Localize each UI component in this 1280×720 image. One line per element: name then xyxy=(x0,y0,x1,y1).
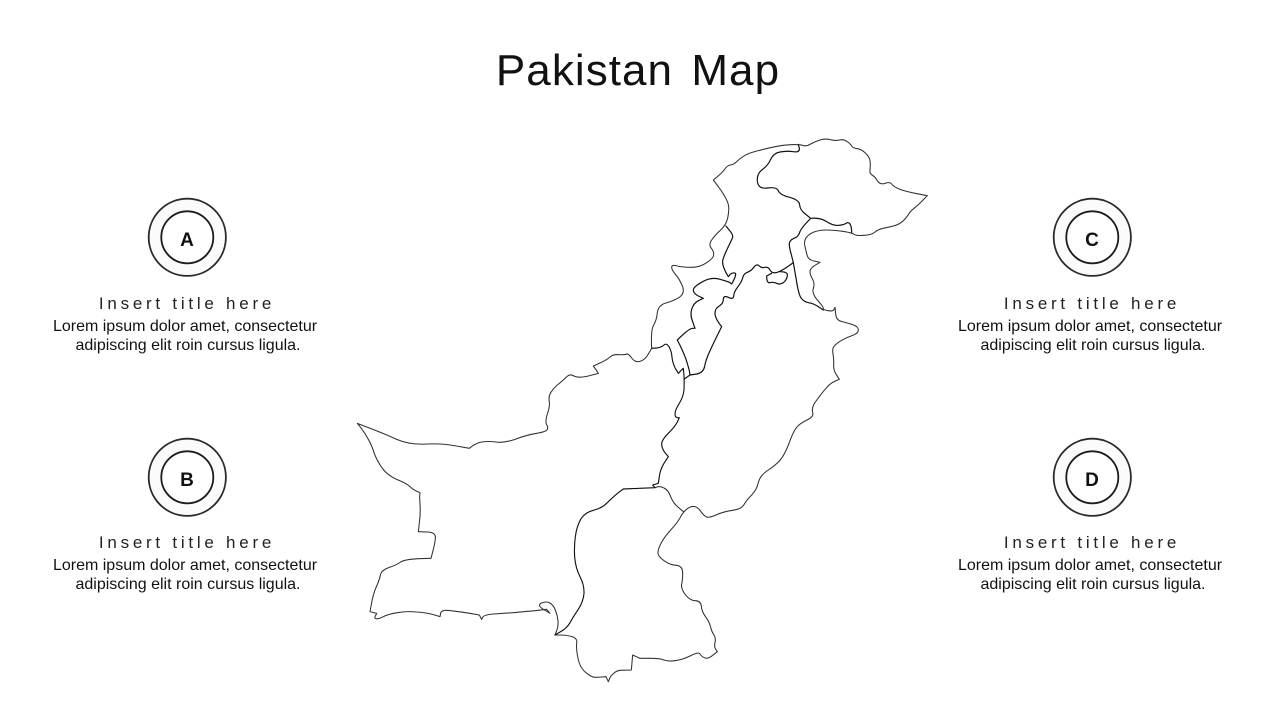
heading A: Insert title here xyxy=(99,294,275,313)
heading C: Insert title here xyxy=(1004,294,1180,313)
text C line 2: adipiscing elit roin cursus ligula. xyxy=(980,337,1206,354)
icon: badge A xyxy=(148,198,227,277)
boundary: Gilgit-Baltistan xyxy=(757,144,811,263)
text B line 2: adipiscing elit roin cursus ligula. xyxy=(76,576,300,593)
boundary: Punjab and Sindh xyxy=(655,487,683,512)
icon: badge D: D xyxy=(1085,470,1099,491)
boundary: Azad Kashmir north xyxy=(811,218,852,233)
text B line 1: Lorem ipsum dolor amet, consectetur xyxy=(53,557,317,574)
boundary: tribal areas xyxy=(677,226,736,340)
icon: badge C xyxy=(1052,198,1132,277)
title: Pakistan Map xyxy=(496,46,780,95)
panel: A xyxy=(53,198,317,354)
outline: southern and western border xyxy=(357,348,652,682)
text D line 2: adipiscing elit roin cursus ligula. xyxy=(980,576,1206,593)
shape: Islamabad xyxy=(767,272,787,284)
heading B: Insert title here xyxy=(99,533,275,552)
heading D: Insert title here xyxy=(1004,533,1180,552)
boundary: Azad Kashmir east xyxy=(793,263,823,310)
text D line 1: Lorem ipsum dolor amet, consectetur xyxy=(958,557,1222,574)
panel: D xyxy=(958,438,1222,593)
icon: badge D xyxy=(1052,438,1132,517)
outline: eastern border xyxy=(640,379,839,661)
text A line 2: adipiscing elit roin cursus ligula. xyxy=(76,337,300,354)
boundary: Punjab and Khyber Pakhtunkhwa xyxy=(677,263,793,375)
icon: badge B xyxy=(148,438,227,517)
icon: badge C: C xyxy=(1085,230,1099,251)
text C line 1: Lorem ipsum dolor amet, consectetur xyxy=(958,318,1222,335)
boundary: Balochistan with Punjab and Sindh xyxy=(555,344,684,635)
panel: B xyxy=(53,438,317,593)
outline: northern border xyxy=(651,139,927,379)
icon: badge A: A xyxy=(180,230,194,251)
icon: badge B: B xyxy=(180,470,194,491)
text A line 1: Lorem ipsum dolor amet, consectetur xyxy=(53,318,317,335)
boundary: link to Balochistan xyxy=(684,375,690,379)
panel: C xyxy=(958,198,1222,354)
